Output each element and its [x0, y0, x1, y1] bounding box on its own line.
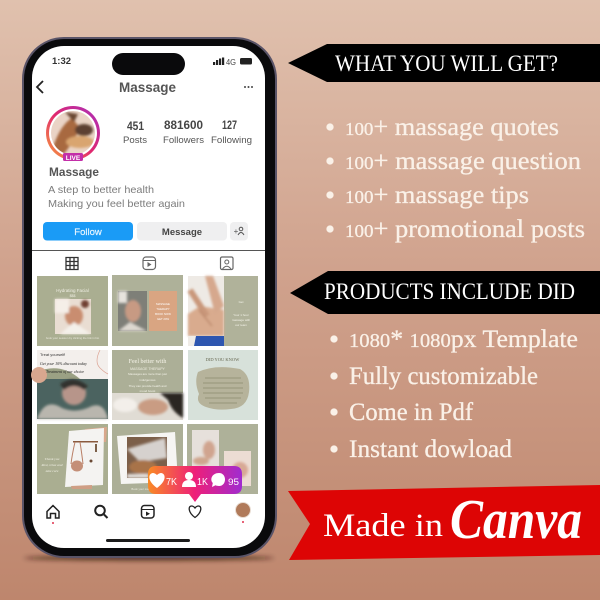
- post 7: paper with macrame: Rest, relax and: [41, 463, 63, 468]
- list: what you will get: [326, 114, 585, 243]
- profile bio: Making you feel better again: [48, 198, 185, 210]
- banner: products include: PRODUCTS INCLUDE DID: [324, 279, 575, 304]
- post 6: blob card: [188, 350, 258, 420]
- post 5: feel better with massage: Feel better with: [129, 359, 166, 365]
- post 2: photo and orange card: GET 20%: [157, 317, 170, 321]
- notification bubble: 95: [228, 477, 239, 488]
- bottom navigation: [47, 502, 250, 524]
- buttons: Follow: [74, 227, 102, 238]
- notification bubble: [148, 466, 242, 502]
- list: what you will get: 100+ massage quotes: [345, 114, 559, 141]
- post 7: paper with macrame: [37, 424, 108, 494]
- post 1: hydrating facial: Hydrating Facial: [56, 288, 89, 293]
- post 8: paper with massage photo: Book your massage today: [131, 487, 164, 491]
- comment icon: [211, 473, 225, 487]
- list: products include: Instant dowload: [349, 436, 513, 463]
- list: what you will get: 100+ promotional posts: [345, 216, 585, 243]
- post 7: paper with macrame: take care: [46, 469, 59, 473]
- buttons: [43, 222, 248, 240]
- post 1: hydrating facial: $$$: [70, 294, 75, 298]
- notification bubble: 1K: [197, 477, 208, 488]
- list: products include: [330, 326, 578, 463]
- heart icon: [149, 473, 165, 488]
- post 4: treat yourself: Get your 10% discount today: [40, 361, 87, 366]
- post 3: back massage: our team: [235, 323, 247, 327]
- status bar: 1:32: [52, 56, 71, 67]
- ribbon: made in canva: Canva: [450, 489, 582, 551]
- profile bio: [48, 165, 185, 210]
- avatar: LIVE: [66, 155, 81, 162]
- profile stats: Followers: [163, 135, 204, 146]
- profile stats: [123, 120, 252, 146]
- tab icons: [66, 257, 233, 270]
- post 6: blob card: DID YOU KNOW: [206, 357, 240, 362]
- profile bio: Massage: [49, 165, 99, 179]
- profile header: [37, 79, 253, 95]
- ribbon: made in canva: Made in: [323, 508, 443, 544]
- phone: [22, 37, 277, 560]
- post 3: back massage: Get: [239, 300, 244, 304]
- profile stats: 451: [127, 121, 145, 133]
- person icon: [182, 472, 196, 487]
- post 1: hydrating facial: [37, 276, 108, 346]
- notification bubble: 7K: [166, 477, 177, 488]
- banner: what you will get: WHAT YOU WILL GET?: [335, 51, 558, 76]
- profile bio: A step to better health: [48, 184, 154, 196]
- post 4: treat yourself: Treat yourself!: [40, 352, 65, 357]
- list: what you will get: 100+ massage tips: [345, 182, 529, 209]
- post 5: feel better with massage: They can provide health and: [129, 384, 167, 388]
- banner: products include: [290, 271, 600, 314]
- status bar: [52, 56, 252, 67]
- post 4: treat yourself: Treatment of our choice: [46, 369, 84, 374]
- post 5: feel better with massage: Massages are more than just: [128, 372, 167, 376]
- home indicator: [106, 539, 190, 542]
- phone shadow: [24, 556, 274, 560]
- profile stats: Following: [211, 135, 252, 146]
- post 2: photo and orange card: BOOK NOW: [155, 312, 171, 316]
- post 3: back massage: massage with: [232, 318, 251, 322]
- post 9: photo collage: [187, 424, 258, 494]
- post 1: hydrating facial: book your session by clicking the link in bio: [46, 336, 100, 340]
- tab divider: [32, 250, 265, 251]
- list: products include: Fully customizable: [349, 363, 538, 390]
- post 7: paper with macrame: Thank you: [45, 457, 60, 461]
- profile stats: 881600: [164, 120, 203, 132]
- list: products include: 1080* 1080px Template: [349, 326, 578, 353]
- banner: what you will get: [288, 44, 600, 82]
- dynamic island: [112, 53, 185, 75]
- post 2: photo and orange card: MASSAGE: [156, 302, 170, 306]
- post grid: [31, 275, 258, 494]
- profile header: Massage: [119, 79, 176, 95]
- post 3: back massage: Your 1 hour: [233, 313, 249, 317]
- post 2: photo and orange card: THERAPY: [156, 307, 170, 311]
- screen: [31, 46, 265, 548]
- post 3: back massage: [188, 276, 258, 346]
- buttons: Message: [162, 227, 202, 238]
- post 2: photo and orange card: [112, 275, 183, 346]
- post 5: feel better with massage: indulgences: [139, 378, 156, 382]
- post 5: feel better with massage: mood boost: [140, 389, 155, 393]
- post 5: feel better with massage: MASSAGE THERAPY: [130, 367, 166, 371]
- profile stats: 127: [222, 120, 237, 132]
- post 4: treat yourself: [31, 350, 108, 419]
- ribbon: made in canva: [288, 485, 600, 560]
- list: products include: Come in Pdf: [349, 399, 474, 426]
- post 5: feel better with massage: [112, 350, 183, 420]
- phone body: [22, 37, 277, 558]
- status bar: 4G: [226, 57, 236, 67]
- profile stats: Posts: [123, 135, 147, 146]
- buttons: +: [234, 227, 239, 236]
- list: what you will get: 100+ massage question: [345, 148, 582, 175]
- avatar: [46, 106, 100, 162]
- post 8: paper with massage photo: [112, 424, 183, 494]
